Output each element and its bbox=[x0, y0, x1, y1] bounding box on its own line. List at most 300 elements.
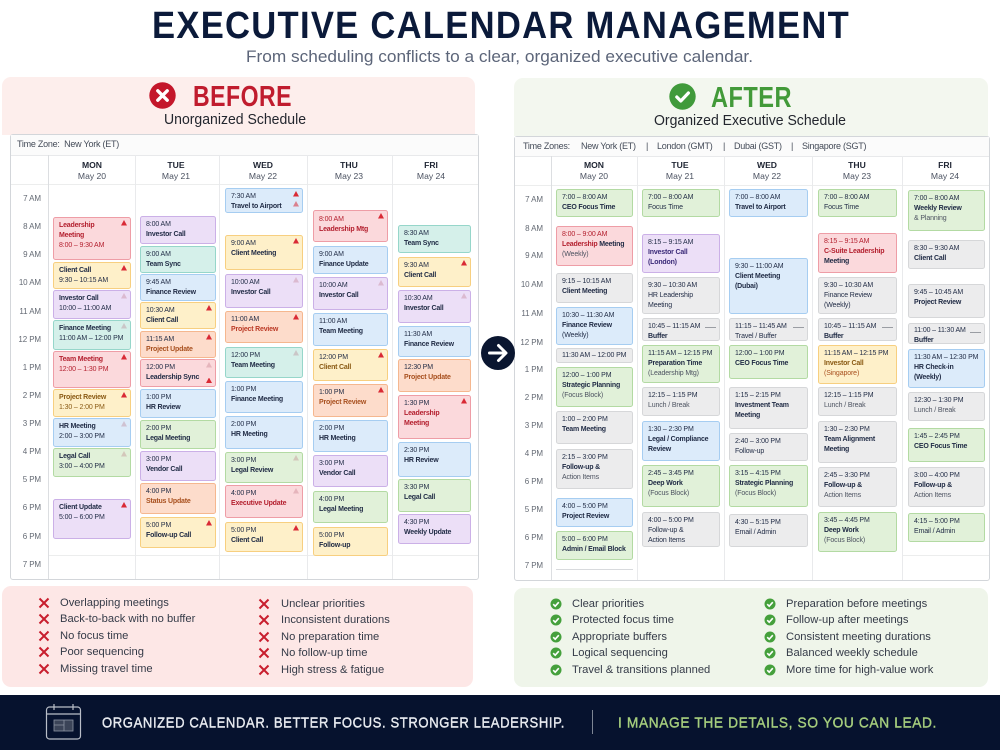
event: deep work tue: (Focus Block) bbox=[648, 490, 689, 497]
list item bbox=[550, 631, 667, 643]
event: client call fri: 8:30 – 9:30 AM bbox=[914, 245, 959, 252]
event: status update tue: Status Update bbox=[146, 498, 191, 505]
calendar: before: 10 AM bbox=[19, 278, 41, 287]
event: investment team meeting wed bbox=[729, 387, 808, 429]
event: legal meeting tue bbox=[140, 420, 216, 449]
event: project update tue: Project Update bbox=[146, 346, 193, 353]
event: finance meeting bbox=[53, 320, 131, 350]
event: strategic planning mon bbox=[556, 367, 633, 407]
event: strategic planning mon: Strategic Planning bbox=[562, 382, 620, 389]
event: preparation time tue: Preparation Time bbox=[648, 360, 702, 367]
event: hr meeting thu: 2:00 PM bbox=[319, 425, 344, 432]
event: hr review fri bbox=[398, 442, 471, 477]
event: follow-up call tue: 5:00 PM bbox=[146, 522, 171, 529]
event: hr review fri: HR Review bbox=[404, 457, 438, 464]
event: follow-up thu: Action Items bbox=[824, 492, 861, 499]
panel: after benefits list: Clear priorities bbox=[572, 598, 644, 610]
event: team meeting thu: 11:00 AM bbox=[319, 318, 347, 325]
event: finance review thu: Finance Review bbox=[824, 292, 872, 299]
event: investment team meeting wed: Meeting bbox=[735, 412, 760, 419]
subtitle: From scheduling conflicts to a clear, organized executive calendar. bbox=[246, 47, 753, 66]
event: legal meeting tue: Legal Meeting bbox=[146, 435, 190, 442]
event: follow-up wed: 2:40 – 3:00 PM bbox=[735, 438, 781, 445]
event: email admin fri: 4:15 – 5:00 PM bbox=[914, 518, 960, 525]
event: travel to airport wed bbox=[729, 189, 808, 217]
panel: before problems list: Overlapping meetings bbox=[60, 597, 169, 609]
calendar: before: May 23 bbox=[335, 170, 363, 180]
event: weekly review fri: Weekly Review bbox=[914, 205, 962, 212]
event: email admin fri: Email / Admin bbox=[914, 528, 955, 535]
list item bbox=[38, 613, 196, 625]
calendar: after: 3 PM bbox=[525, 421, 543, 430]
event: lunch tue: 12:15 – 1:15 PM bbox=[648, 392, 697, 399]
event: finance meeting: Finance Meeting bbox=[59, 325, 111, 332]
event: strategic planning wed: Strategic Planning bbox=[735, 480, 793, 487]
calendar: after: 12 PM bbox=[520, 338, 543, 347]
event: follow-up mon: Action Items bbox=[562, 474, 599, 481]
calendar: before: 8 AM bbox=[23, 222, 41, 231]
calendar: after bbox=[514, 136, 990, 581]
list item bbox=[550, 598, 644, 610]
event: weekly update fri: 4:30 PM bbox=[404, 519, 429, 526]
event: c-suite leadership thu: Meeting bbox=[824, 258, 849, 265]
event: finance update thu bbox=[313, 246, 388, 274]
event: client meeting mon bbox=[556, 273, 633, 303]
event: follow-up wed: Follow-up bbox=[735, 448, 764, 455]
event: project review thu: 1:00 PM bbox=[319, 389, 344, 396]
event: team alignment thu: 1:30 – 2:30 PM bbox=[824, 426, 870, 433]
list item bbox=[764, 647, 918, 659]
calendar: before: 6 PM bbox=[23, 503, 41, 512]
event: investor call tue: Investor Call bbox=[648, 249, 688, 256]
calendar: after: May 21 bbox=[666, 170, 694, 180]
event: status update tue: 4:00 PM bbox=[146, 488, 171, 495]
event: investor call thu: 10:00 AM bbox=[319, 282, 348, 289]
heading: after: AFTER bbox=[711, 82, 792, 114]
event: investor call thu: Investor Call bbox=[824, 360, 864, 367]
icon: arrow from before to after bbox=[481, 336, 515, 370]
event: project update tue: 11:15 AM bbox=[146, 336, 174, 343]
event: team meeting bbox=[53, 351, 131, 388]
event: hr meeting thu: HR Meeting bbox=[319, 435, 356, 442]
event: deep work tue bbox=[642, 465, 720, 507]
event: admin email block mon bbox=[556, 531, 633, 560]
event: legal meeting tue: 2:00 PM bbox=[146, 425, 171, 432]
event: finance meeting wed: 1:00 PM bbox=[231, 386, 256, 393]
event: hr leadership meeting tue: 9:30 – 10:30 AM bbox=[648, 282, 697, 289]
event: client call thu: 12:00 PM bbox=[319, 354, 348, 361]
event: client call tue bbox=[140, 302, 216, 329]
event: weekly update fri bbox=[398, 514, 471, 544]
event: follow-up fri: 3:00 – 4:00 PM bbox=[914, 472, 960, 479]
calendar: after: 6 PM bbox=[525, 477, 543, 486]
event: email admin wed: Email / Admin bbox=[735, 529, 776, 536]
panel: after benefits list bbox=[514, 588, 988, 687]
event: leadership meeting fri bbox=[398, 395, 471, 439]
event: follow-up call tue: Follow-up Call bbox=[146, 532, 191, 539]
event: finance review mon: (Weekly) bbox=[562, 332, 588, 339]
event: travel buffer wed: Travel / Buffer bbox=[735, 333, 777, 340]
calendar: before: WED bbox=[253, 160, 273, 170]
event: client call bbox=[53, 262, 131, 289]
calendar: after: New York (ET) bbox=[581, 141, 636, 151]
list item bbox=[258, 631, 379, 643]
event: hr meeting: 2:00 – 3:00 PM bbox=[59, 433, 105, 440]
event: lunch tue bbox=[642, 387, 720, 416]
calendar: before: FRI bbox=[424, 160, 438, 170]
event: strategic planning wed bbox=[729, 465, 808, 507]
list item bbox=[258, 647, 367, 659]
event: hr check-in fri bbox=[908, 349, 985, 388]
calendar: after: | bbox=[723, 141, 725, 151]
panel: before problems list: No preparation time bbox=[281, 631, 379, 643]
event: travel to airport wed: 7:00 – 8:00 AM bbox=[735, 194, 780, 201]
event: admin email block mon: 5:00 – 6:00 PM bbox=[562, 536, 608, 543]
calendar: before: MON bbox=[82, 160, 102, 170]
subheading: organized executive schedule: Organized Executive Schedule bbox=[654, 113, 846, 129]
calendar: after: 6 PM bbox=[525, 533, 543, 542]
event: buffer thu: Buffer bbox=[824, 333, 843, 340]
event: hr review fri: 2:30 PM bbox=[404, 447, 429, 454]
list item bbox=[764, 598, 927, 610]
calendar: after: Time Zones: bbox=[523, 141, 570, 151]
calendar: after: 7 PM bbox=[525, 561, 543, 570]
event: legal review wed: 3:00 PM bbox=[231, 457, 256, 464]
panel: after header bbox=[514, 78, 988, 136]
event: lunch thu bbox=[818, 387, 897, 416]
calendar: after: May 24 bbox=[931, 170, 959, 180]
event: hr meeting wed: 2:00 PM bbox=[231, 421, 256, 428]
calendar: after: 7 AM bbox=[525, 195, 543, 204]
event: buffer tue: Buffer bbox=[648, 333, 667, 340]
event: client meeting mon: 9:15 – 10:15 AM bbox=[562, 278, 611, 285]
event: finance review tue: Finance Review bbox=[146, 289, 196, 296]
calendar: after: May 20 bbox=[580, 170, 608, 180]
panel: before problems list: Back-to-back with no buffer bbox=[60, 613, 195, 625]
event: weekly review fri bbox=[908, 190, 985, 231]
event: leadership meeting fri: 1:30 PM bbox=[404, 400, 429, 407]
calendar: before: THU bbox=[340, 160, 358, 170]
event: finance review mon: Finance Review bbox=[562, 322, 612, 329]
event: lunch fri bbox=[908, 392, 985, 421]
event: team sync fri: Team Sync bbox=[404, 240, 439, 247]
event: weekly review fri: 7:00 – 8:00 AM bbox=[914, 195, 959, 202]
event: buffer mon: 11:30 AM – 12:00 PM bbox=[562, 352, 626, 359]
event: finance review thu bbox=[818, 277, 897, 314]
list item bbox=[258, 614, 390, 626]
event: investor call thu bbox=[818, 345, 897, 384]
event: leadership meeting: Meeting bbox=[59, 232, 84, 239]
event: deep work thu: 3:45 – 4:45 PM bbox=[824, 517, 870, 524]
panel: before header bbox=[2, 77, 475, 135]
event: finance meeting: 11:00 AM – 12:00 PM bbox=[59, 335, 123, 342]
event: client meeting wed bbox=[225, 235, 303, 270]
calendar: before: 5 PM bbox=[23, 475, 41, 484]
event: focus time tue: Focus Time bbox=[648, 204, 683, 211]
event: finance review tue: 9:45 AM bbox=[146, 279, 171, 286]
calendar: after: May 23 bbox=[843, 170, 871, 180]
calendar: after: Dubai (GST) bbox=[734, 141, 782, 151]
event: follow-up mon: 2:15 – 3:00 PM bbox=[562, 454, 608, 461]
event: leadership meeting mon: (Weekly) bbox=[562, 251, 588, 258]
event: follow-up tue: Action Items bbox=[648, 537, 685, 544]
event: finance update thu: Finance Update bbox=[319, 261, 368, 268]
event: lunch fri: 12:30 – 1:30 PM bbox=[914, 397, 963, 404]
calendar: after: 11 AM bbox=[521, 309, 543, 318]
event: vendor call thu bbox=[313, 455, 388, 487]
panel: after benefits list: Protected focus time bbox=[572, 614, 674, 626]
event: investor call fri: 10:30 AM bbox=[404, 295, 433, 302]
event: ceo focus time fri bbox=[908, 428, 985, 462]
list item bbox=[764, 631, 931, 643]
event: hr leadership meeting tue: Meeting bbox=[648, 302, 672, 309]
event: leadership meeting bbox=[53, 217, 131, 260]
panel: before problems list: Poor sequencing bbox=[60, 646, 144, 658]
panel: after benefits list: Consistent meeting durations bbox=[786, 631, 931, 643]
event: client meeting mon: Client Meeting bbox=[562, 288, 607, 295]
event: travel to airport wed: Travel to Airport bbox=[231, 203, 282, 210]
calendar: before: May 21 bbox=[162, 170, 190, 180]
event: leadership meeting mon: 8:00 – 9:00 AM bbox=[562, 231, 607, 238]
event: project review wed: 11:00 AM bbox=[231, 316, 259, 323]
event: investor call bbox=[53, 290, 131, 319]
event: hr meeting: HR Meeting bbox=[59, 423, 96, 430]
event: buffer tue bbox=[642, 318, 720, 341]
event: leadership meeting: 8:00 – 9:30 AM bbox=[59, 242, 104, 249]
event: client meeting wed: (Dubai) bbox=[735, 283, 758, 290]
event: leadership meeting fri: Leadership bbox=[404, 410, 439, 417]
event: project update fri bbox=[398, 359, 471, 392]
event: client call fri bbox=[908, 240, 985, 269]
event: buffer thu bbox=[818, 318, 897, 341]
event: follow-up mon bbox=[556, 449, 633, 489]
panel: after benefits list: Balanced weekly schedule bbox=[786, 647, 918, 659]
event: leadership mtg thu: 8:00 AM bbox=[319, 216, 344, 223]
event: deep work tue: Deep Work bbox=[648, 480, 683, 487]
event: email admin wed bbox=[729, 514, 808, 547]
panel: before problems list: Missing travel time bbox=[60, 663, 153, 675]
event: focus time thu: Focus Time bbox=[824, 204, 859, 211]
event: follow-up wed bbox=[729, 433, 808, 461]
calendar: after: | bbox=[646, 141, 648, 151]
footer banner bbox=[0, 695, 1000, 750]
event: team sync tue: 9:00 AM bbox=[146, 251, 171, 258]
panel: before problems list: High stress & fatigue bbox=[281, 664, 384, 676]
event: ceo focus time fri: 1:45 – 2:45 PM bbox=[914, 433, 960, 440]
event: executive update wed: Executive Update bbox=[231, 500, 286, 507]
event: investor call wed: Investor Call bbox=[231, 289, 271, 296]
event: preparation time tue bbox=[642, 345, 720, 383]
event: follow-up tue: 4:00 – 5:00 PM bbox=[648, 517, 694, 524]
icon: calendar bbox=[46, 704, 82, 740]
event: project review wed: Project Review bbox=[231, 326, 278, 333]
calendar: after: TUE bbox=[671, 160, 689, 170]
event: email admin fri bbox=[908, 513, 985, 542]
event: project review wed bbox=[225, 311, 303, 343]
event: leadership meeting mon bbox=[556, 226, 633, 266]
event: team sync fri: 8:30 AM bbox=[404, 230, 429, 237]
event: client call thu bbox=[313, 349, 388, 381]
event: investor call fri: Investor Call bbox=[404, 305, 444, 312]
event: follow-up fri bbox=[908, 467, 985, 507]
event: project review fri bbox=[908, 284, 985, 318]
icon: green check bbox=[669, 83, 696, 110]
calendar: after: 8 AM bbox=[525, 224, 543, 233]
event: project update fri: Project Update bbox=[404, 374, 451, 381]
event: focus time tue: 7:00 – 8:00 AM bbox=[648, 194, 693, 201]
event: investor call: 10:00 – 11:00 AM bbox=[59, 305, 111, 312]
event: investor call: Investor Call bbox=[59, 295, 99, 302]
list item bbox=[258, 664, 384, 676]
event: hr meeting wed bbox=[225, 416, 303, 449]
calendar: after: THU bbox=[848, 160, 866, 170]
event: team alignment thu bbox=[818, 421, 897, 463]
event: finance meeting wed bbox=[225, 381, 303, 413]
calendar: before: 6 PM bbox=[23, 532, 41, 541]
event: investor call tue: Investor Call bbox=[146, 231, 186, 238]
event: leadership sync tue: 12:00 PM bbox=[146, 364, 175, 371]
event: investor call tue bbox=[140, 216, 216, 244]
event: team meeting thu: Team Meeting bbox=[319, 328, 363, 335]
event: hr check-in fri: 11:30 AM – 12:30 PM bbox=[914, 354, 978, 361]
panel: after benefits list: More time for high-value work bbox=[786, 664, 933, 676]
event: travel to airport wed: Travel to Airport bbox=[735, 204, 786, 211]
event: travel buffer wed: 11:15 – 11:45 AM bbox=[735, 323, 787, 330]
event: strategic planning mon: (Focus Block) bbox=[562, 392, 603, 399]
event: status update tue bbox=[140, 483, 216, 514]
event: team sync fri bbox=[398, 225, 471, 253]
event: buffer tue: 10:45 – 11:15 AM bbox=[648, 323, 700, 330]
event: team meeting mon: 1:00 – 2:00 PM bbox=[562, 416, 608, 423]
event: project review thu bbox=[313, 384, 388, 417]
panel: before problems list bbox=[2, 586, 473, 687]
event: client call wed: Client Call bbox=[231, 537, 263, 544]
event: buffer fri: 11:00 – 11:30 AM bbox=[914, 327, 966, 334]
event: finance meeting wed: Finance Meeting bbox=[231, 396, 283, 403]
event: client call fri: Client Call bbox=[404, 272, 436, 279]
event: hr leadership meeting tue bbox=[642, 277, 720, 314]
event: follow-up thu bbox=[818, 467, 897, 507]
event: project review bbox=[53, 389, 131, 417]
calendar: after: 1 PM bbox=[525, 365, 543, 374]
event: buffer fri bbox=[908, 323, 985, 344]
event: finance review thu: 9:30 – 10:30 AM bbox=[824, 282, 873, 289]
event: follow-up thu bbox=[313, 527, 388, 556]
event: investor call thu: Investor Call bbox=[319, 292, 359, 299]
event: investor call wed bbox=[225, 274, 303, 308]
event: preparation time tue: (Leadership Mtg) bbox=[648, 370, 699, 377]
event: project review fri: Project Review bbox=[914, 299, 961, 306]
event: hr review tue: 1:00 PM bbox=[146, 394, 171, 401]
event: team sync tue: Team Sync bbox=[146, 261, 181, 268]
event: client meeting wed: 9:00 AM bbox=[231, 240, 256, 247]
event: lunch thu: 12:15 – 1:15 PM bbox=[824, 392, 873, 399]
event: project review fri: 9:45 – 10:45 AM bbox=[914, 289, 963, 296]
list item bbox=[38, 663, 153, 675]
event: project review mon bbox=[556, 498, 633, 527]
calendar: before: 12 PM bbox=[18, 335, 41, 344]
event: deep work thu: (Focus Block) bbox=[824, 537, 865, 544]
list item bbox=[550, 647, 668, 659]
event: buffer fri: Buffer bbox=[914, 337, 933, 344]
event: ceo focus time wed: CEO Focus Time bbox=[735, 360, 788, 367]
calendar: after: | bbox=[791, 141, 793, 151]
event: focus time thu: 7:00 – 8:00 AM bbox=[824, 194, 869, 201]
event: travel to airport wed: 7:30 AM bbox=[231, 193, 256, 200]
list item bbox=[38, 646, 144, 658]
event: ceo focus time mon: CEO Focus Time bbox=[562, 204, 615, 211]
event: leadership sync tue: Leadership Sync bbox=[146, 374, 199, 381]
event: legal meeting thu bbox=[313, 491, 388, 523]
calendar: after: MON bbox=[584, 160, 604, 170]
event: finance review mon bbox=[556, 307, 633, 345]
event: client call: Client Call bbox=[59, 267, 91, 274]
event: follow-up fri: Follow-up & bbox=[914, 482, 952, 489]
event: follow-up tue bbox=[642, 512, 720, 547]
event: team meeting: Team Meeting bbox=[59, 356, 103, 363]
event: vendor call thu: Vendor Call bbox=[319, 470, 355, 477]
event: project update fri: 12:30 PM bbox=[404, 364, 433, 371]
panel: after benefits list: Travel & transitions planned bbox=[572, 664, 710, 676]
event: legal review wed: Legal Review bbox=[231, 467, 273, 474]
event: team meeting wed: Team Meeting bbox=[231, 362, 275, 369]
calendar: after: 10 AM bbox=[521, 280, 543, 289]
event: vendor call tue bbox=[140, 451, 216, 481]
calendar: before: TUE bbox=[167, 160, 185, 170]
event: lunch tue: Lunch / Break bbox=[648, 402, 690, 409]
calendar: after: May 22 bbox=[753, 170, 781, 180]
event: team meeting mon bbox=[556, 411, 633, 444]
event: follow-up thu: Follow-up bbox=[319, 542, 350, 549]
event: client call fri: Client Call bbox=[914, 255, 946, 262]
event: legal call bbox=[53, 448, 131, 477]
event: ceo focus time fri: CEO Focus Time bbox=[914, 443, 967, 450]
event: team sync tue bbox=[140, 246, 216, 273]
event: legal meeting thu: 4:00 PM bbox=[319, 496, 344, 503]
icon: red cross bbox=[149, 82, 176, 109]
event: leadership mtg thu bbox=[313, 210, 388, 242]
event: weekly review fri: & Planning bbox=[914, 215, 947, 222]
event: hr leadership meeting tue: HR Leadership bbox=[648, 292, 693, 299]
event: investor call tue bbox=[642, 234, 720, 273]
panel: before problems list: Inconsistent durations bbox=[281, 614, 390, 626]
divider bbox=[592, 710, 593, 734]
list item bbox=[550, 664, 710, 676]
event: team meeting wed: 12:00 PM bbox=[231, 352, 260, 359]
event: follow-up fri: Action Items bbox=[914, 492, 951, 499]
calendar: after: WED bbox=[757, 160, 777, 170]
event: vendor call thu: 3:00 PM bbox=[319, 460, 344, 467]
calendar: before: May 20 bbox=[78, 170, 106, 180]
event: hr meeting thu bbox=[313, 420, 388, 452]
event: c-suite leadership thu: 8:15 – 9:15 AM bbox=[824, 238, 869, 245]
event: investor call thu: 11:15 AM – 12:15 PM bbox=[824, 350, 888, 357]
event: client call tue: 10:30 AM bbox=[146, 307, 175, 314]
event: client call fri bbox=[398, 257, 471, 287]
title: EXECUTIVE CALENDAR MANAGEMENT bbox=[152, 5, 850, 47]
event: legal call fri: 3:30 PM bbox=[404, 484, 429, 491]
event: executive update wed bbox=[225, 485, 303, 518]
event: investor call tue: (London) bbox=[648, 259, 677, 266]
calendar: after: London (GMT) bbox=[657, 141, 713, 151]
event: strategic planning wed: (Focus Block) bbox=[735, 490, 776, 497]
event: legal compliance tue: Legal / Compliance bbox=[648, 436, 708, 443]
event: team meeting mon: Team Meeting bbox=[562, 426, 606, 433]
event: ceo focus time wed: 12:00 – 1:00 PM bbox=[735, 350, 784, 357]
event: project review mon: 4:00 – 5:00 PM bbox=[562, 503, 608, 510]
panel: after benefits list: Preparation before meetings bbox=[786, 598, 927, 610]
event: team alignment thu: Team Alignment bbox=[824, 436, 875, 443]
